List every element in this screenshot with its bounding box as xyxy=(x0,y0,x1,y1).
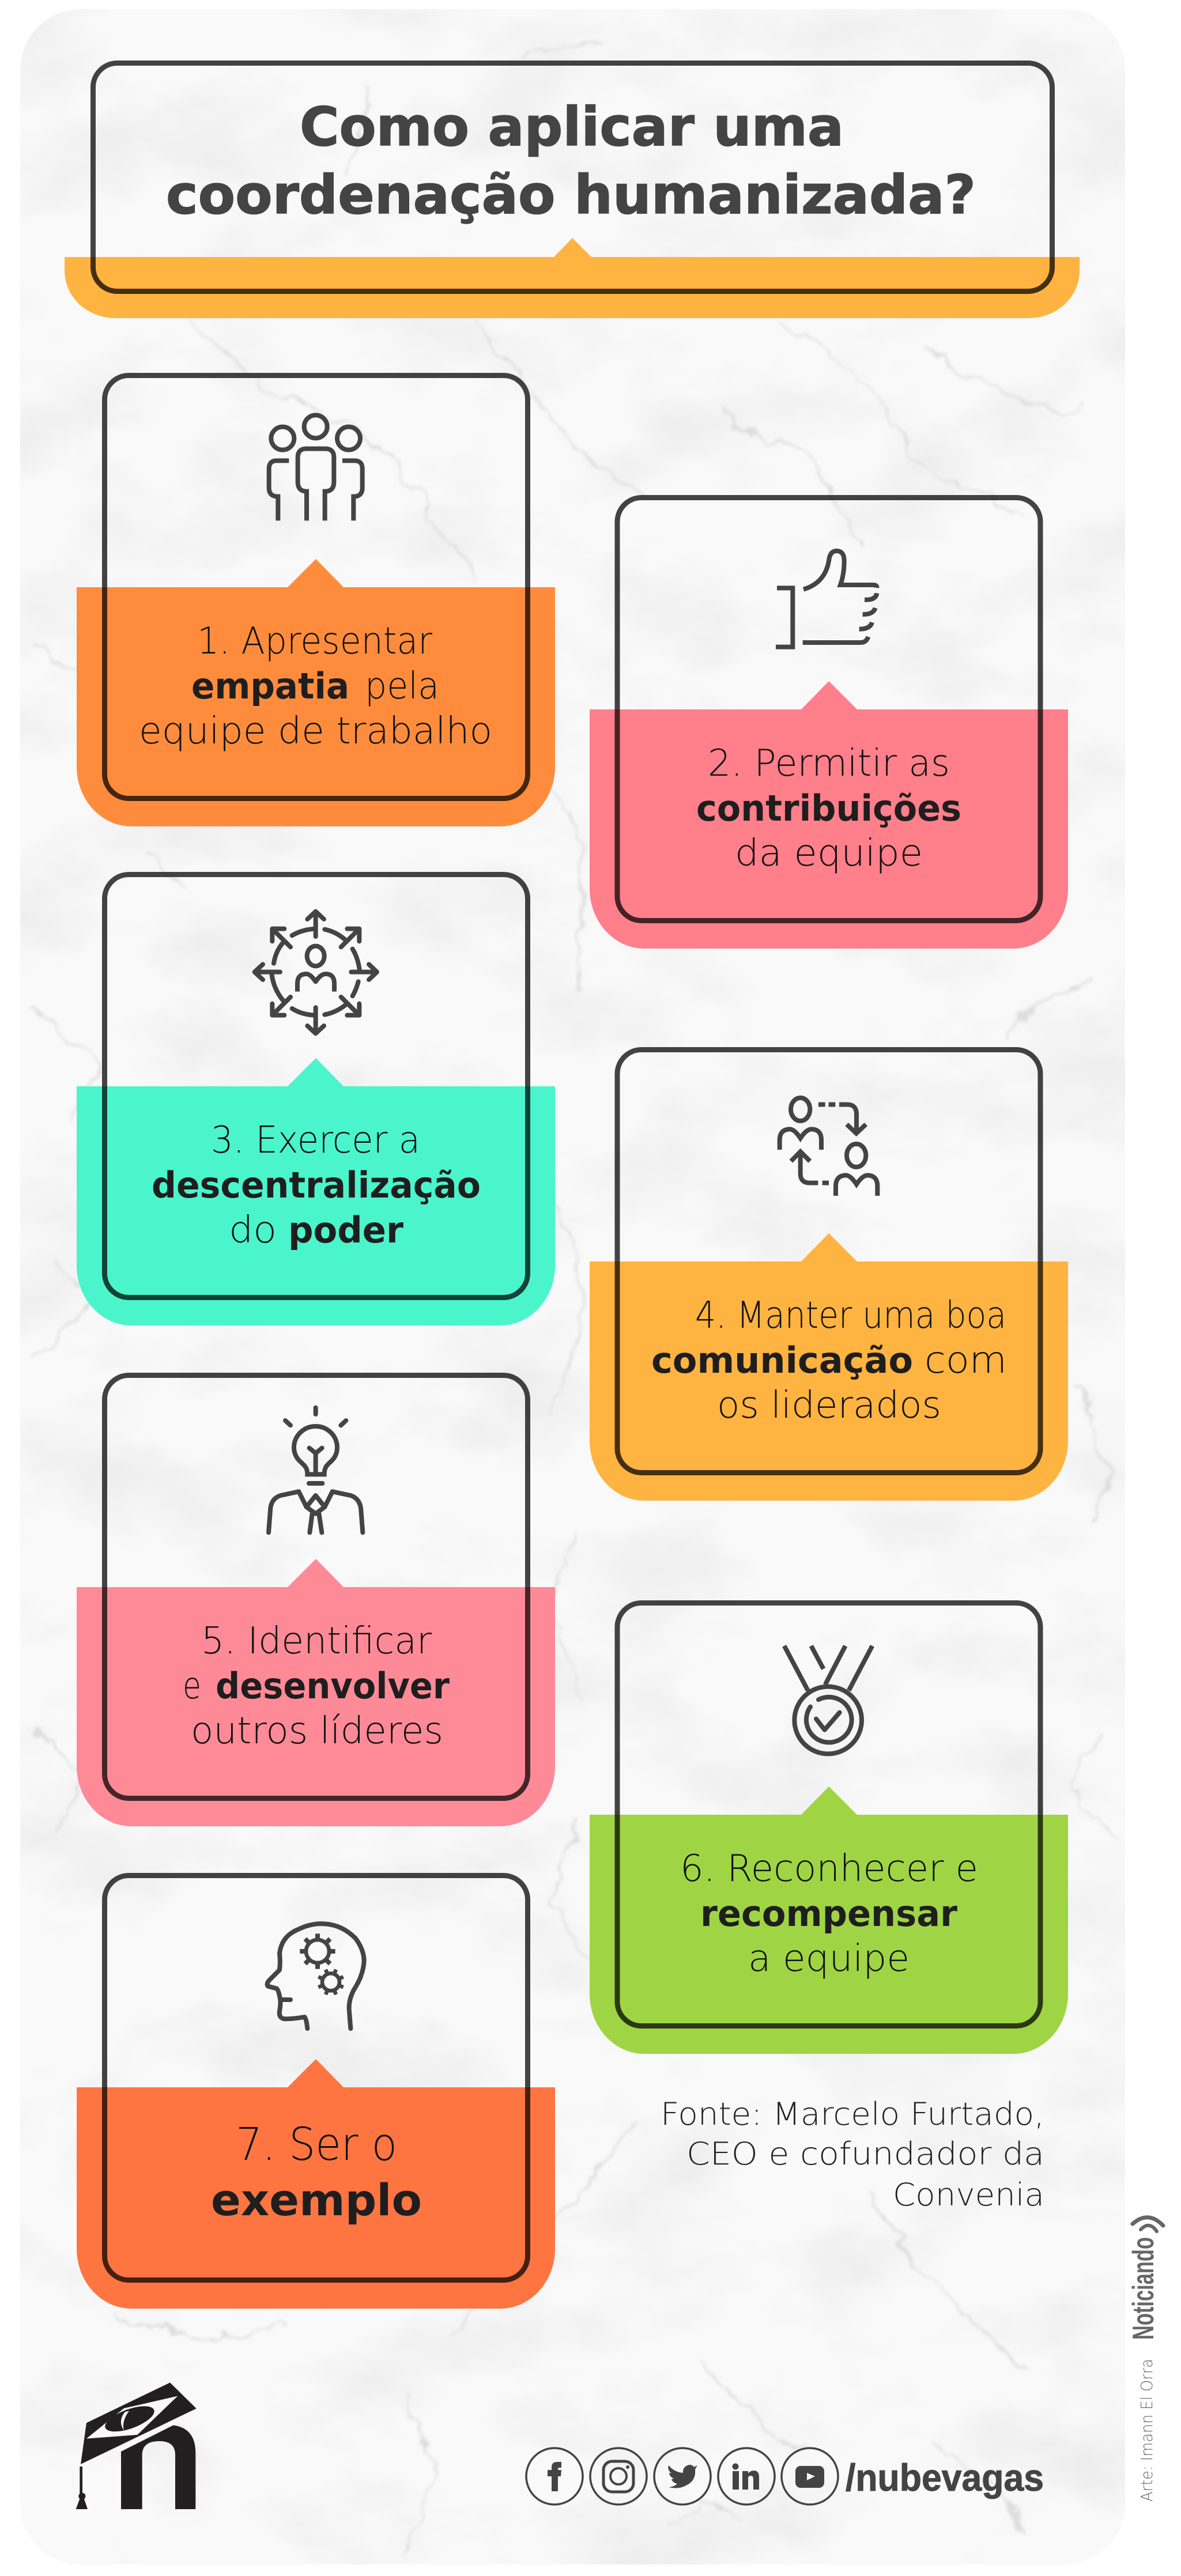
card 5 text: 5. Identificar xyxy=(201,1620,432,1663)
icon: person with arrows xyxy=(255,912,377,1033)
card 4 band xyxy=(590,1233,1068,1501)
card 1 band xyxy=(77,559,555,826)
icon: linkedin xyxy=(718,2448,775,2505)
card 6 band xyxy=(590,1786,1068,2054)
art credit: Arte: Imann El Orra xyxy=(1137,2359,1156,2502)
card 1 text: pela xyxy=(365,665,439,708)
card 4 text: com xyxy=(925,1339,1007,1382)
icon: two people exchanging xyxy=(780,1098,877,1196)
card 1 text: equipe de trabalho xyxy=(139,710,492,753)
card 7 text: exemplo xyxy=(211,2174,422,2226)
title frame xyxy=(93,63,1052,292)
card 4 frame xyxy=(617,1050,1040,1473)
card 7 text: 7. Ser o xyxy=(236,2119,397,2171)
logo: nube xyxy=(76,2382,198,2509)
icon: head with gears xyxy=(267,1924,364,2029)
title text: Como aplicar uma xyxy=(300,96,844,158)
card 1: empatia xyxy=(77,376,555,826)
card 6 text: 6. Reconhecer e xyxy=(680,1848,978,1890)
card 4 text: comunicação xyxy=(651,1339,913,1381)
card 5: desenvolver líderes xyxy=(77,1375,555,1826)
icon: thumbs up xyxy=(776,551,877,647)
card 1 text: empatia xyxy=(191,665,349,707)
card 4 text xyxy=(651,1294,1007,1427)
source text: Fonte: Marcelo Furtado, xyxy=(661,2096,1044,2132)
card 2 text: 2. Permitir as xyxy=(708,742,950,785)
card 7 frame xyxy=(105,1875,528,2280)
card 3 text: poder xyxy=(288,1209,403,1251)
card 2 text xyxy=(696,742,961,875)
title text xyxy=(166,96,976,226)
card 6: recompensar xyxy=(590,1603,1068,2054)
card 4 text: os liderados xyxy=(717,1384,941,1427)
card 2 band xyxy=(590,681,1068,949)
card 2 text: contribuições xyxy=(696,787,961,829)
card 6 text: recompensar xyxy=(700,1893,957,1935)
card 3: descentralização xyxy=(77,875,555,1325)
card 2 frame xyxy=(617,498,1040,921)
card 1 frame xyxy=(105,376,528,799)
source text: CEO e cofundador da xyxy=(686,2136,1044,2172)
card 2: contribuições xyxy=(590,498,1068,949)
card 5 band xyxy=(77,1559,555,1826)
card 5 text: outros líderes xyxy=(191,1710,443,1752)
title text: coordenação humanizada? xyxy=(166,164,976,226)
card 7 text xyxy=(211,2119,422,2226)
icon: facebook xyxy=(526,2448,583,2505)
card 1 text xyxy=(139,620,492,753)
social media row xyxy=(526,2448,1044,2505)
card 3 text: 3. Exercer a xyxy=(211,1119,420,1162)
card 5 text xyxy=(183,1620,450,1752)
side credits xyxy=(1127,2218,1163,2502)
icon: leader with light bulb xyxy=(269,1408,363,1532)
card 3 text xyxy=(152,1119,481,1252)
source text: Convenia xyxy=(893,2177,1044,2213)
card 3 text: do xyxy=(229,1209,277,1252)
icon: team xyxy=(269,415,363,520)
card 3 frame xyxy=(105,875,528,1298)
icon: instagram xyxy=(590,2448,647,2505)
card 5 frame xyxy=(105,1375,528,1798)
icon: twitter xyxy=(654,2448,711,2505)
card 4 text: 4. Manter uma boa xyxy=(695,1294,1006,1337)
card 6 text xyxy=(680,1848,978,1980)
social handle: /nubevagas xyxy=(846,2456,1044,2499)
card 3 band xyxy=(77,1058,555,1325)
card 4: comunicação xyxy=(590,1050,1068,1501)
title band xyxy=(65,238,1080,318)
icon: youtube xyxy=(782,2448,838,2505)
card 5 text: e xyxy=(183,1665,201,1708)
card 7 band xyxy=(77,2059,555,2309)
icon: medal xyxy=(784,1646,872,1754)
card 6 text: a equipe xyxy=(748,1937,910,1980)
title block xyxy=(65,63,1080,318)
card 6 frame xyxy=(617,1603,1040,2026)
card 5 text: desenvolver xyxy=(216,1665,450,1707)
card 7: exemplo xyxy=(77,1875,555,2309)
card 1 text: 1. Apresentar xyxy=(197,620,433,663)
source text xyxy=(661,2096,1044,2213)
Noticiando brand: Noticiando xyxy=(1127,2237,1160,2340)
card 2 text: da equipe xyxy=(735,832,923,875)
card 3 text: descentralização xyxy=(152,1164,481,1206)
